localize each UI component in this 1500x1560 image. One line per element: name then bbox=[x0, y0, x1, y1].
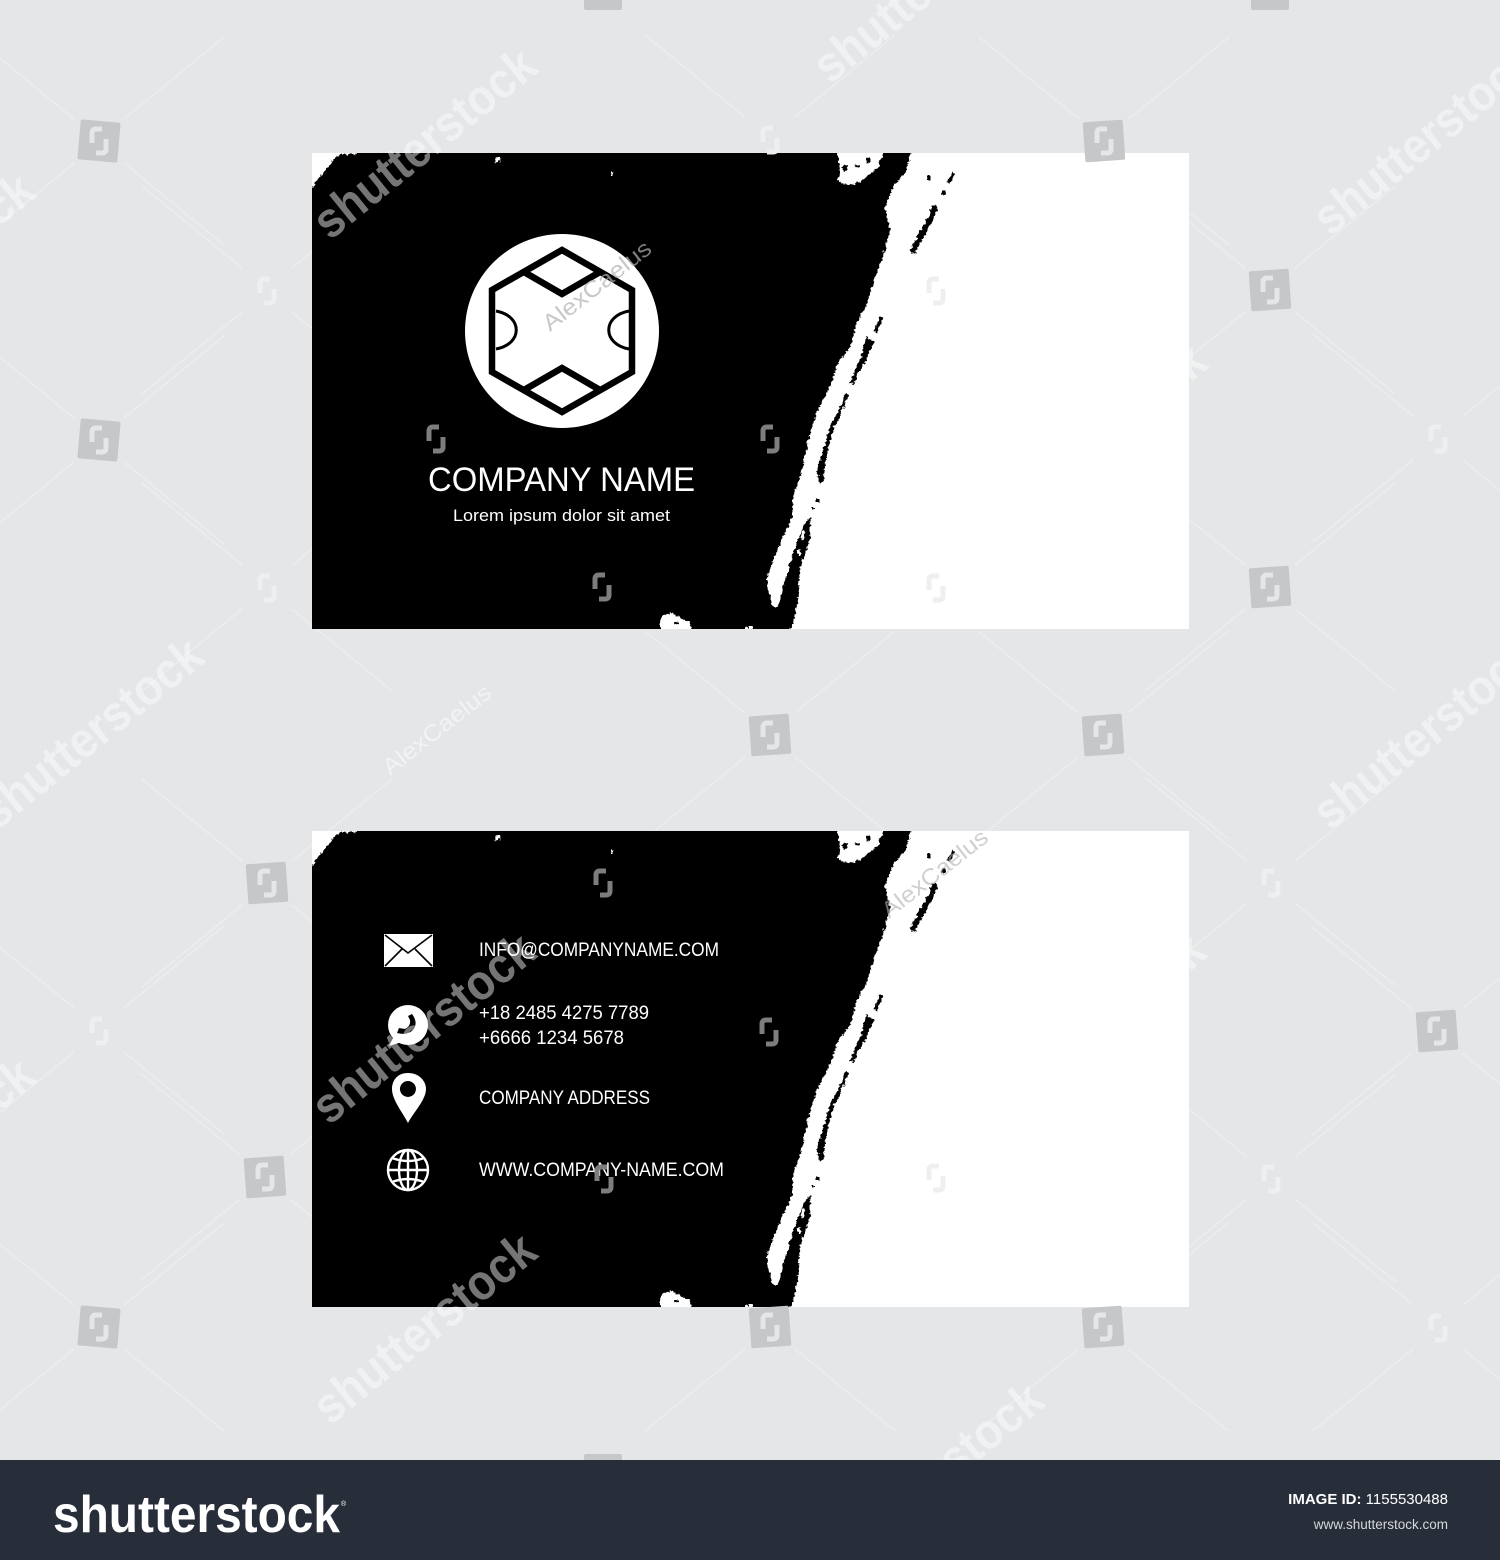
address: COMPANY ADDRESS bbox=[479, 1088, 650, 1109]
watermark text 1: shutterstock bbox=[302, 36, 547, 250]
icon: envelope bbox=[384, 934, 433, 967]
footer background bbox=[0, 1460, 1500, 1560]
card back brush shape bbox=[305, 826, 955, 1314]
company name: COMPANY NAME bbox=[428, 461, 695, 499]
author name 2: AlexCaelus bbox=[377, 679, 496, 780]
watermark author names bbox=[377, 235, 993, 923]
website: WWW.COMPANY-NAME.COM bbox=[479, 1160, 724, 1181]
footer logo: shutterstock bbox=[53, 1486, 340, 1544]
phone number 1: +18 2485 4275 7789 bbox=[479, 1003, 649, 1024]
logo hexagon bbox=[492, 250, 632, 412]
email: INFO@COMPANYNAME.COM bbox=[479, 940, 719, 961]
card front white base bbox=[312, 153, 1189, 629]
watermark text 9: shutterstock bbox=[301, 921, 546, 1135]
watermark marks on light ground bbox=[92, 128, 1445, 1340]
image id: IMAGE ID: 1155530488 bbox=[1288, 1491, 1448, 1508]
watermark text 11: shutterstock bbox=[302, 1221, 547, 1435]
watermark text 5: shutterstock bbox=[972, 332, 1217, 546]
registered mark: ® bbox=[341, 1500, 347, 1508]
author name 1: AlexCaelus bbox=[537, 235, 656, 336]
phone numbers bbox=[479, 1003, 649, 1049]
phone number 2: +6666 1234 5678 bbox=[479, 1028, 624, 1049]
icon: phone bbox=[388, 1005, 428, 1046]
watermark marks on black bbox=[429, 427, 777, 1191]
panel: card back bbox=[305, 826, 955, 1314]
watermark text 10: shutterstock bbox=[971, 921, 1216, 1135]
panel: card front bbox=[305, 148, 955, 636]
author name 3: AlexCaelus bbox=[876, 824, 993, 923]
footer bar bbox=[0, 1460, 1500, 1560]
tagline: Lorem ipsum dolor sit amet bbox=[453, 507, 670, 525]
logo circle bbox=[465, 234, 659, 428]
card front brush shape bbox=[305, 148, 955, 636]
card back white base bbox=[312, 831, 1189, 1307]
watermark marks on squares bbox=[92, 129, 1444, 1339]
icon: globe bbox=[388, 1150, 428, 1190]
site url: www.shutterstock.com bbox=[1313, 1517, 1448, 1532]
icon: map pin bbox=[392, 1073, 426, 1123]
logo bbox=[465, 234, 659, 428]
